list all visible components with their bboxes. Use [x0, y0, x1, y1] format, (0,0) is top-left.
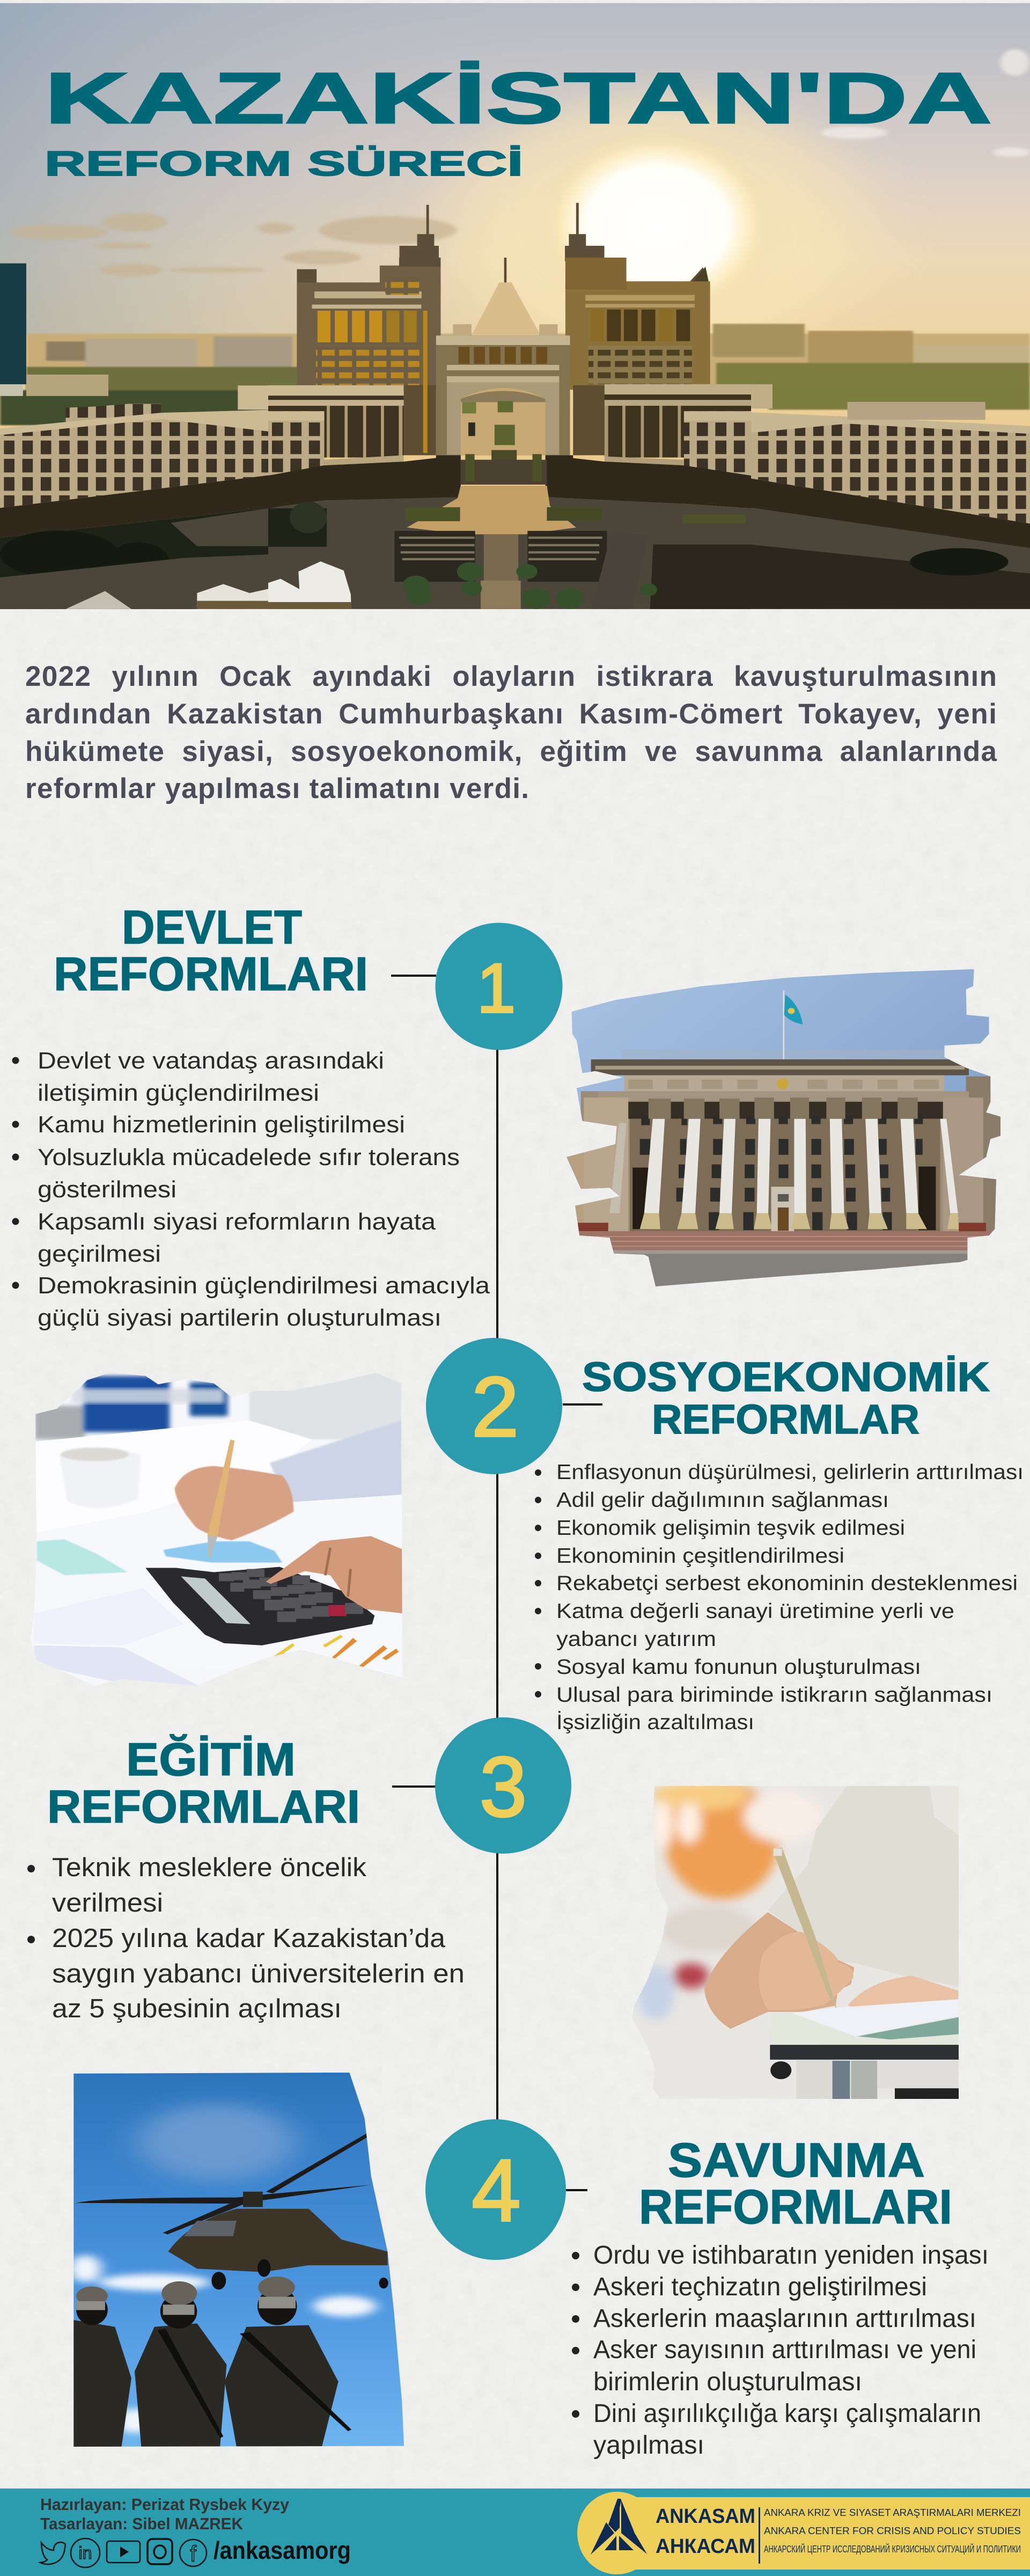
section 2 photo: calculator and hands	[30, 1373, 402, 1686]
cascades	[394, 531, 475, 582]
section 1 bullet list	[12, 1048, 490, 1331]
wing left	[268, 385, 404, 457]
typing hand	[266, 1536, 404, 1614]
right tower	[565, 281, 710, 390]
social handle: /ankasamorg	[214, 2536, 351, 2564]
logo descriptions	[764, 2507, 1021, 2555]
section 4 bullet list: Dini aşırılıkçılığa karşı çalışmaların	[593, 2399, 981, 2428]
section 1 heading: DEVLET	[122, 901, 302, 954]
icon: facebook: f	[190, 2541, 196, 2566]
soldiers	[73, 2320, 339, 2447]
distant city	[0, 324, 1030, 425]
section 1 bullet list: iletişimin güçlendirilmesi	[38, 1080, 319, 1106]
trees	[402, 562, 657, 609]
footer credits	[40, 2495, 290, 2533]
logo divider	[759, 2507, 760, 2564]
section 4 number circle: 4	[472, 2141, 521, 2240]
section 2 bullet list: yabancı yatırım	[556, 1628, 716, 1651]
intro paragraph: hükümete siyasi, sosyoekonomik, eğitim ve savunma alanlarında	[25, 736, 997, 767]
section 3 bullet list: 2025 yılına kadar Kazakistan’da	[52, 1924, 446, 1953]
section 4 connector	[566, 2189, 587, 2191]
section 1 number circle: 1	[477, 949, 516, 1027]
intro paragraph: reformlar yapılması talimatını verdi.	[25, 773, 529, 804]
logo descriptions: ANKARA CENTER FOR CRISIS AND POLICY STUDIES	[764, 2526, 1021, 2536]
section 1 bullet list: Yolsuzlukla mücadelede sıfır tolerans	[38, 1144, 460, 1170]
section 4 bullet list: yapılması	[593, 2431, 704, 2460]
section 2 bullet list: Rekabetçi serbest ekonominin desteklenmesi	[556, 1572, 1018, 1595]
section 1 number circle	[436, 923, 562, 1050]
intro paragraph: ardından Kazakistan Cumhurbaşkanı Kasım-Cömert Tokayev, yeni	[25, 698, 997, 730]
icon: instagram	[148, 2539, 172, 2564]
section 2 bullet list: Ulusal para biriminde istikrarın sağlanması	[556, 1684, 992, 1707]
section 2 bullet list: Ekonomik gelişimin teşvik edilmesi	[556, 1517, 905, 1540]
glass tower	[0, 264, 26, 384]
footer credits: Hazırlayan: Perizat Rysbek Kyzy	[40, 2495, 290, 2514]
section 1 bullet list: gösterilmesi	[38, 1176, 176, 1203]
section 4 number circle	[425, 2119, 566, 2260]
timeline vertical line	[496, 1020, 498, 2147]
section 3 bullet list: Teknik mesleklere öncelik	[52, 1853, 367, 1882]
intro paragraph: 2022 yılının Ocak ayındaki olayların istikrara kavuşturulmasının	[25, 661, 997, 692]
section 1 bullet list: Devlet ve vatandaş arasındaki	[38, 1048, 384, 1074]
footer band	[0, 2489, 1030, 2576]
logo mark	[591, 2499, 647, 2555]
section 3 connector	[392, 1785, 436, 1788]
section 2 heading: SOSYOEKONOMİK	[582, 1354, 990, 1400]
ANKASAM logo block	[577, 2492, 1030, 2574]
section 1 bullet list: geçirilmesi	[38, 1241, 161, 1267]
section 2 bullet list: Ekonominin çeşitlendirilmesi	[556, 1545, 844, 1568]
intro paragraph	[25, 661, 997, 804]
section 4 heading: SAVUNMA	[668, 2134, 925, 2187]
section 3 bullet list	[27, 1853, 465, 2023]
section 4 bullet list: Asker sayısının arttırılması ve yeni	[593, 2336, 976, 2364]
logo descriptions: ANKARA KRIZ VE SIYASET ARAŞTIRMALARI MERKEZI	[764, 2507, 1021, 2518]
section 4 bullet list: Askerlerin maaşlarının arttırılması	[593, 2304, 976, 2333]
section 1 bullet list: Kamu hizmetlerinin geliştirilmesi	[38, 1111, 405, 1138]
section 4 heading	[639, 2134, 952, 2234]
section 1 bullet list: güçlü siyasi partilerin oluşturulması	[38, 1305, 442, 1331]
wing right	[605, 384, 751, 457]
section 3 heading	[47, 1734, 360, 1833]
icon: twitter	[40, 2542, 65, 2564]
base	[268, 455, 461, 508]
tents	[268, 561, 351, 609]
hero photograph: KazMunayGas building at sunset	[0, 3, 1030, 609]
section 2 bullet list: Enflasyonun düşürülmesi, gelirlerin arttırılması	[556, 1461, 1024, 1484]
hero centre: towers, arch and plaza	[268, 258, 751, 609]
footer credits: Tasarlayan: Sibel MAZREK	[40, 2514, 244, 2533]
section 4 bullet list: birimlerin oluşturulması	[593, 2368, 862, 2396]
section 1 heading	[54, 901, 368, 1000]
section 2 connector	[563, 1403, 602, 1406]
section 2 bullet list: İşsizliğin azaltılması	[556, 1711, 754, 1734]
outer wings	[238, 385, 277, 409]
subtitle: REFORM SÜRECİ	[45, 144, 523, 183]
logo wordmarks: ANKASAM	[656, 2505, 755, 2528]
section 4 bullet list: Ordu ve istihbaratın yeniden inşası	[593, 2241, 989, 2270]
section 3 heading: REFORMLARI	[47, 1781, 360, 1833]
section 3 bullet list: verilmesi	[52, 1889, 163, 1918]
section 4 heading: REFORMLARI	[639, 2180, 952, 2234]
calculator	[145, 1567, 374, 1645]
plaza	[268, 497, 751, 609]
helicopter	[76, 2185, 371, 2235]
section 1 photo: government building	[558, 966, 1009, 1299]
section 1 bullet list: Demokrasinin güçlendirilmesi amacıyla	[38, 1272, 490, 1299]
section 3 heading: EĞİTİM	[126, 1734, 296, 1785]
writing hand	[174, 1466, 293, 1540]
section 3 number circle	[435, 1717, 571, 1854]
logo wordmarks	[656, 2505, 755, 2558]
section 2 heading: REFORMLAR	[652, 1396, 919, 1443]
section 3 bullet list: az 5 şubesinin açılması	[52, 1994, 342, 2023]
icon: linkedin	[71, 2538, 100, 2567]
section 4 bullet list: Askeri teçhizatın geliştirilmesi	[593, 2273, 927, 2301]
logo wordmarks: АНКАСАМ	[656, 2535, 755, 2558]
section 3 bullet list: saygın yabancı üniversitelerin en	[52, 1959, 465, 1988]
section 2 number circle	[426, 1338, 562, 1474]
arch	[436, 335, 570, 455]
section 2 bullet list: Sosyal kamu fonunun oluşturulması	[556, 1656, 921, 1679]
title	[45, 58, 992, 183]
section 3 number circle: 3	[480, 1740, 527, 1834]
title: KAZAKİSTAN'DA	[45, 58, 992, 138]
section 1 connector	[391, 975, 436, 977]
icon: facebook	[180, 2540, 207, 2566]
section 4 photo: helicopter and soldiers	[70, 2073, 409, 2447]
section 2 bullet list: Adil gelir dağılımının sağlanması	[556, 1489, 889, 1512]
section 4 bullet list	[572, 2241, 989, 2460]
icon: youtube	[107, 2541, 140, 2563]
section 2 number circle: 2	[472, 1360, 519, 1454]
section 1 heading: REFORMLARI	[54, 947, 368, 1000]
section 2 bullet list: Katma değerli sanayi üretimine yerli ve	[556, 1600, 954, 1623]
section 2 bullet list	[535, 1461, 1024, 1734]
tower caps and spires above the centre block	[297, 203, 708, 283]
outer grounds	[0, 507, 276, 609]
section 2 heading	[582, 1354, 990, 1443]
section 3 photo: student writing exam	[632, 1786, 959, 2099]
icon: linkedin: in	[79, 2543, 92, 2563]
section 1 bullet list: Kapsamlı siyasi reformların hayata	[38, 1209, 436, 1235]
left tower	[297, 282, 440, 391]
